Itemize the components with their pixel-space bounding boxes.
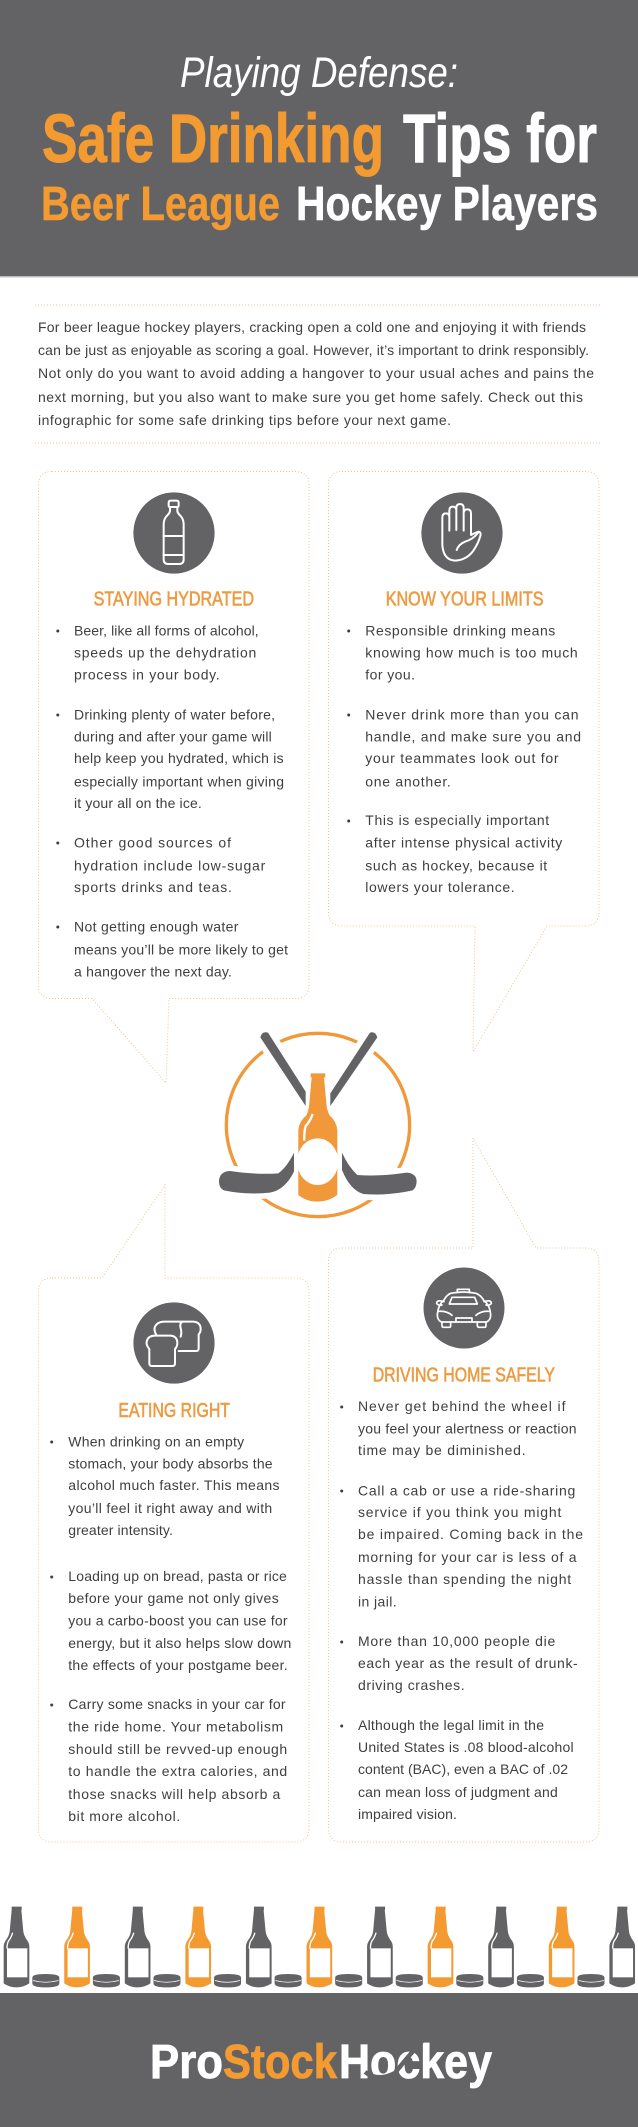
bullet list: you’ll feel it right away and with bbox=[68, 1500, 272, 1516]
title line 1: Playing Defense: bbox=[180, 49, 458, 97]
bullet list: knowing how much is too much bbox=[365, 644, 578, 660]
bullet list bbox=[340, 1398, 583, 1822]
hockey sticks bbox=[219, 1032, 417, 1195]
bullet list: content (BAC), even a BAC of .02 bbox=[358, 1761, 568, 1777]
bullet list: process in your body. bbox=[74, 666, 220, 682]
logo: Pro Stock Hockey: Pro bbox=[150, 2036, 223, 2089]
ring bbox=[226, 1033, 410, 1217]
intro paragraph bbox=[38, 319, 594, 428]
central emblem: crossed sticks and beer bottle bbox=[219, 1032, 417, 1217]
logo stick cut-out bbox=[365, 2040, 423, 2077]
bullet list: you feel your alertness or reaction bbox=[358, 1420, 576, 1436]
panel: staying hydrated bbox=[38, 472, 309, 1083]
speech bubble outline bbox=[328, 472, 599, 1052]
bullet list: Carry some snacks in your car for bbox=[68, 1696, 286, 1712]
panel: eating right bbox=[38, 1185, 309, 1842]
icon: bread slices bbox=[133, 1302, 215, 1384]
bullet list: Never drink more than you can bbox=[365, 706, 578, 722]
bullet list: the effects of your postgame beer. bbox=[68, 1657, 288, 1673]
speech bubble outline bbox=[38, 472, 309, 1083]
bullet list: for you. bbox=[365, 666, 415, 682]
bullet list: time may be diminished. bbox=[358, 1442, 526, 1458]
bullet list: hassle than spending the night bbox=[358, 1571, 571, 1587]
bullet list: after intense physical activity bbox=[365, 834, 562, 850]
footer banner bbox=[0, 1993, 638, 2127]
bullet list: Never get behind the wheel if bbox=[358, 1398, 566, 1414]
bullet list: Although the legal limit in the bbox=[358, 1717, 544, 1733]
intro paragraph: can be just as enjoyable as scoring a goal. However, it’s important to drink responsibly. bbox=[38, 342, 589, 358]
bullet list: such as hockey, because it bbox=[365, 857, 547, 873]
bullet list: be impaired. Coming back in the bbox=[358, 1526, 583, 1542]
bullet list: hydration include low-sugar bbox=[74, 857, 266, 873]
speech bubble outline bbox=[328, 1138, 599, 1842]
bullet list: lowers your tolerance. bbox=[365, 879, 515, 895]
intro paragraph: infographic for some safe drinking tips before your next game. bbox=[38, 412, 451, 428]
bullet list: service if you think you might bbox=[358, 1504, 562, 1520]
logo: Pro Stock Hockey bbox=[150, 2036, 492, 2089]
bullet list: the ride home. Your metabolism bbox=[68, 1719, 283, 1735]
bullet list: in jail. bbox=[358, 1593, 397, 1609]
bullet list: can mean loss of judgment and bbox=[358, 1784, 558, 1800]
row of bottles and pucks bbox=[4, 1907, 635, 1987]
bullet list: means you’ll be more likely to get bbox=[74, 941, 288, 957]
bullet list: sports drinks and teas. bbox=[74, 879, 232, 895]
intro paragraph: Not only do you want to avoid adding a hangover to your usual aches and pains the bbox=[38, 365, 594, 381]
title line 3 bbox=[41, 178, 598, 231]
bullet list: handle, and make sure you and bbox=[365, 728, 581, 744]
bullet list: you a carbo-boost you can use for bbox=[68, 1612, 288, 1628]
speech bubble outline bbox=[38, 1185, 309, 1842]
bullet list: a hangover the next day. bbox=[74, 963, 232, 979]
beer bottle bbox=[297, 1073, 338, 1202]
bullet list: your teammates look out for bbox=[365, 750, 559, 766]
title line 3: Beer League bbox=[41, 178, 280, 231]
heading: know your limits: KNOW YOUR LIMITS bbox=[386, 589, 544, 611]
bullet list: When drinking on an empty bbox=[68, 1433, 244, 1449]
header banner bbox=[0, 0, 638, 278]
bullet list: bit more alcohol. bbox=[68, 1808, 180, 1824]
heading: driving home safely: DRIVING HOME SAFELY bbox=[373, 1365, 555, 1387]
logo: Pro Stock Hockey: Hockey bbox=[339, 2036, 492, 2089]
bullet list: should still be revved-up enough bbox=[68, 1741, 287, 1757]
bullet list: Beer, like all forms of alcohol, bbox=[74, 622, 259, 638]
bullet list: those snacks will help absorb a bbox=[68, 1786, 281, 1802]
bullet list: Loading up on bread, pasta or rice bbox=[68, 1568, 287, 1584]
bullet list: alcohol much faster. This means bbox=[68, 1477, 280, 1493]
bullet list: United States is .08 blood-alcohol bbox=[358, 1739, 574, 1755]
bullet list: before your game not only gives bbox=[68, 1590, 279, 1606]
bullet list: More than 10,000 people die bbox=[358, 1633, 556, 1649]
bullet list bbox=[50, 1433, 291, 1824]
bullet list: Drinking plenty of water before, bbox=[74, 706, 275, 722]
bullet list: greater intensity. bbox=[68, 1522, 173, 1538]
panel: driving home safely bbox=[328, 1138, 599, 1842]
bullet list: one another. bbox=[365, 773, 451, 789]
bullet list: impaired vision. bbox=[358, 1806, 457, 1822]
bullet list: This is especially important bbox=[365, 812, 549, 828]
bullet list: Other good sources of bbox=[74, 834, 231, 850]
bullet list: Call a cab or use a ride-sharing bbox=[358, 1482, 575, 1498]
icon: raised hand bbox=[421, 492, 503, 574]
intro paragraph: For beer league hockey players, cracking open a cold one and enjoying it with friends bbox=[38, 319, 586, 335]
bullet list: speeds up the dehydration bbox=[74, 644, 256, 660]
bullet list bbox=[56, 622, 288, 979]
bullet list: especially important when giving bbox=[74, 773, 284, 789]
bullet list: to handle the extra calories, and bbox=[68, 1763, 287, 1779]
icon: taxi bbox=[424, 1268, 504, 1348]
bullet list: help keep you hydrated, which is bbox=[74, 750, 284, 766]
bullet list: it your all on the ice. bbox=[74, 795, 202, 811]
heading: staying hydrated: STAYING HYDRATED bbox=[94, 589, 254, 611]
logo: Pro Stock Hockey: Stock bbox=[223, 2036, 337, 2089]
bullet list: during and after your game will bbox=[74, 728, 272, 744]
bullet list: energy, but it also helps slow down bbox=[68, 1635, 291, 1651]
bullet list: morning for your car is less of a bbox=[358, 1549, 577, 1565]
bullet list bbox=[347, 622, 581, 895]
bullet list: Responsible drinking means bbox=[365, 622, 555, 638]
bullet list: Not getting enough water bbox=[74, 918, 239, 934]
panel: know your limits bbox=[328, 472, 599, 1052]
intro paragraph: next morning, but you also want to make sure you get home safely. Check out this bbox=[38, 389, 583, 405]
bullet list: driving crashes. bbox=[358, 1677, 465, 1693]
title line 2: Safe Drinking bbox=[42, 100, 384, 177]
bullet list: stomach, your body absorbs the bbox=[68, 1455, 273, 1471]
bullet list: each year as the result of drunk- bbox=[358, 1655, 578, 1671]
heading: eating right: EATING RIGHT bbox=[118, 1400, 230, 1422]
icon: water bottle bbox=[133, 492, 215, 574]
